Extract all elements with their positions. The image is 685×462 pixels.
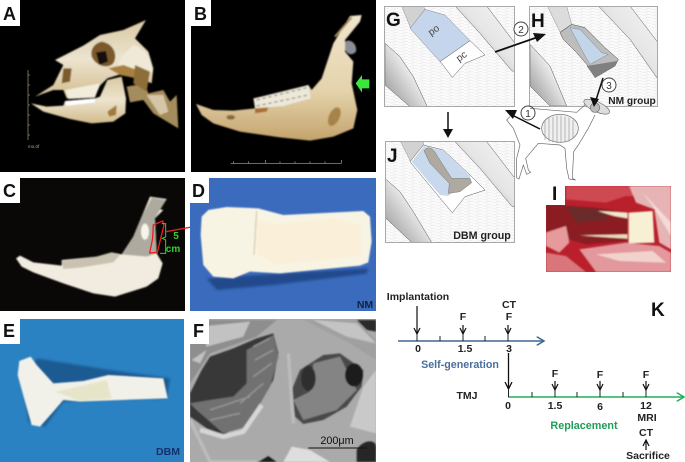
arrow: G to H, step 2: 2 <box>518 25 524 36</box>
SEM texture <box>190 319 376 462</box>
panel G: surgical diagram <box>384 6 515 107</box>
scaffold <box>201 207 372 278</box>
arrow: goat to G, step 1 <box>505 106 540 129</box>
arrow: step 3 to goat head: 3 <box>606 81 612 92</box>
panel H: NM implant diagram <box>530 6 658 106</box>
green arrow <box>356 75 369 93</box>
replacement axis: 1.5 <box>548 400 562 412</box>
panel A: sheep skull CT: mo.0f <box>28 144 40 149</box>
pc region <box>440 41 485 77</box>
size label: 5 <box>173 231 179 242</box>
label po: po <box>426 23 442 38</box>
label K: K <box>651 300 665 321</box>
replacement axis: F <box>643 369 650 381</box>
label D: D <box>192 181 205 201</box>
drawing <box>385 7 514 106</box>
panel I: surgical photo <box>546 184 671 272</box>
bone <box>18 357 168 427</box>
replacement axis: Sacrifice <box>626 450 670 462</box>
self-generation axis <box>387 291 544 371</box>
self-generation axis: F <box>506 311 513 323</box>
model mandible <box>16 197 167 297</box>
red arrow <box>166 227 192 232</box>
green bracket <box>160 224 166 253</box>
DBM group label: DBM group <box>453 230 511 242</box>
panel C: 3D printed mandible <box>0 178 197 311</box>
panel J: DBM diagram <box>385 142 515 242</box>
arrow: step 3 to goat head <box>590 78 616 107</box>
connector arrow <box>505 353 512 389</box>
replacement axis: TMJ <box>456 390 478 402</box>
replacement axis: F <box>597 369 604 381</box>
replacement axis: 0 <box>505 400 511 412</box>
replacement axis <box>456 368 684 462</box>
panel F: SEM image <box>190 319 376 462</box>
replacement axis: MRI <box>637 412 657 424</box>
panel K: timeline <box>387 291 684 462</box>
label H: H <box>531 11 545 32</box>
panel C: 3D printed mandible: cm <box>166 244 180 255</box>
label pc: pc <box>454 49 469 64</box>
scaffold in place <box>560 24 618 78</box>
panel A: sheep skull CT <box>0 0 185 172</box>
po region <box>410 9 470 62</box>
panel E: DBM scaffold <box>0 319 184 462</box>
self-generation axis: Self-generation <box>421 359 499 371</box>
DBM label: DBM <box>156 446 180 458</box>
labels: Implantation <box>387 291 449 303</box>
label C: C <box>3 181 16 201</box>
label A: A <box>3 4 16 24</box>
label B: B <box>194 4 207 24</box>
replacement axis: 6 <box>597 401 603 413</box>
panel D: NM scaffold <box>190 178 376 311</box>
red region <box>150 221 164 253</box>
scale <box>28 70 30 140</box>
replacement axis: Replacement <box>550 420 618 432</box>
label J: J <box>387 146 398 167</box>
skull <box>30 19 180 129</box>
replacement axis: 12 <box>640 400 652 412</box>
self-generation axis: 0 <box>415 343 421 355</box>
goat illustration <box>506 98 610 180</box>
label G: G <box>386 10 401 31</box>
arrows <box>417 306 508 333</box>
panel B: mandible CT <box>191 0 376 172</box>
arrow: G to H, step 2 <box>495 22 546 52</box>
photo <box>546 186 671 272</box>
label F: F <box>193 321 204 341</box>
replacement axis: F <box>552 368 559 380</box>
arrow: G to J <box>443 112 453 138</box>
mandible <box>195 14 370 164</box>
arrow: goat to G, step 1: 1 <box>525 109 531 120</box>
self-generation axis: CT <box>502 299 517 311</box>
label E: E <box>3 321 15 341</box>
label I: I <box>552 184 557 205</box>
drawing <box>386 142 514 242</box>
NM group label: NM group <box>608 96 656 107</box>
self-generation axis: 1.5 <box>458 343 472 355</box>
NM label: NM <box>357 299 373 311</box>
scale bar label: 200μm <box>320 435 354 447</box>
self-generation axis: 3 <box>506 343 512 355</box>
replacement axis: CT <box>639 427 654 439</box>
self-generation axis: F <box>460 311 467 323</box>
drawing <box>530 7 657 106</box>
